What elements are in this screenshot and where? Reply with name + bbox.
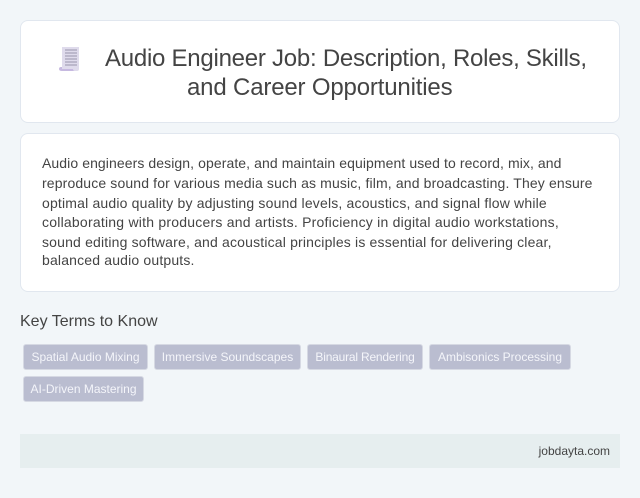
description text: collaborating with producers and artists. Proficiency in digital audio workstations, [42, 214, 559, 230]
heading: key terms: Key Terms to Know [20, 313, 158, 330]
panel: description card [20, 133, 620, 292]
tag [307, 344, 423, 370]
tag: Immersive Soundscapes [162, 350, 293, 364]
tag: Ambisonics Processing [438, 350, 562, 364]
footer bar [20, 434, 620, 468]
description text: balanced audio outputs. [42, 252, 195, 268]
title: Audio Engineer Job: Description, Roles, Skills, [105, 45, 587, 72]
tag [429, 344, 571, 370]
description text: sound editing software, and acoustical principles is essential for delivering clear, [42, 234, 552, 250]
title: and Career Opportunities [187, 74, 452, 101]
description text: optimal audio quality by adjusting sound levels, acoustics, and signal flow while [42, 195, 547, 211]
description text: reproduce sound for various media such as music, film, and broadcasting. They ensure [42, 175, 593, 191]
panel: title card [20, 20, 620, 123]
icon: document scroll [59, 47, 79, 71]
tags: key terms [23, 344, 571, 402]
description text [42, 155, 593, 268]
tag: AI-Driven Mastering [30, 382, 137, 396]
footer text: jobdayta.com [539, 444, 610, 458]
tag [23, 344, 148, 370]
tag: Binaural Rendering [315, 350, 415, 364]
tag [23, 376, 144, 402]
tag: Spatial Audio Mixing [31, 350, 140, 364]
description text: Audio engineers design, operate, and maintain equipment used to record, mix, and [42, 155, 562, 171]
tag [154, 344, 301, 370]
title [105, 45, 587, 101]
